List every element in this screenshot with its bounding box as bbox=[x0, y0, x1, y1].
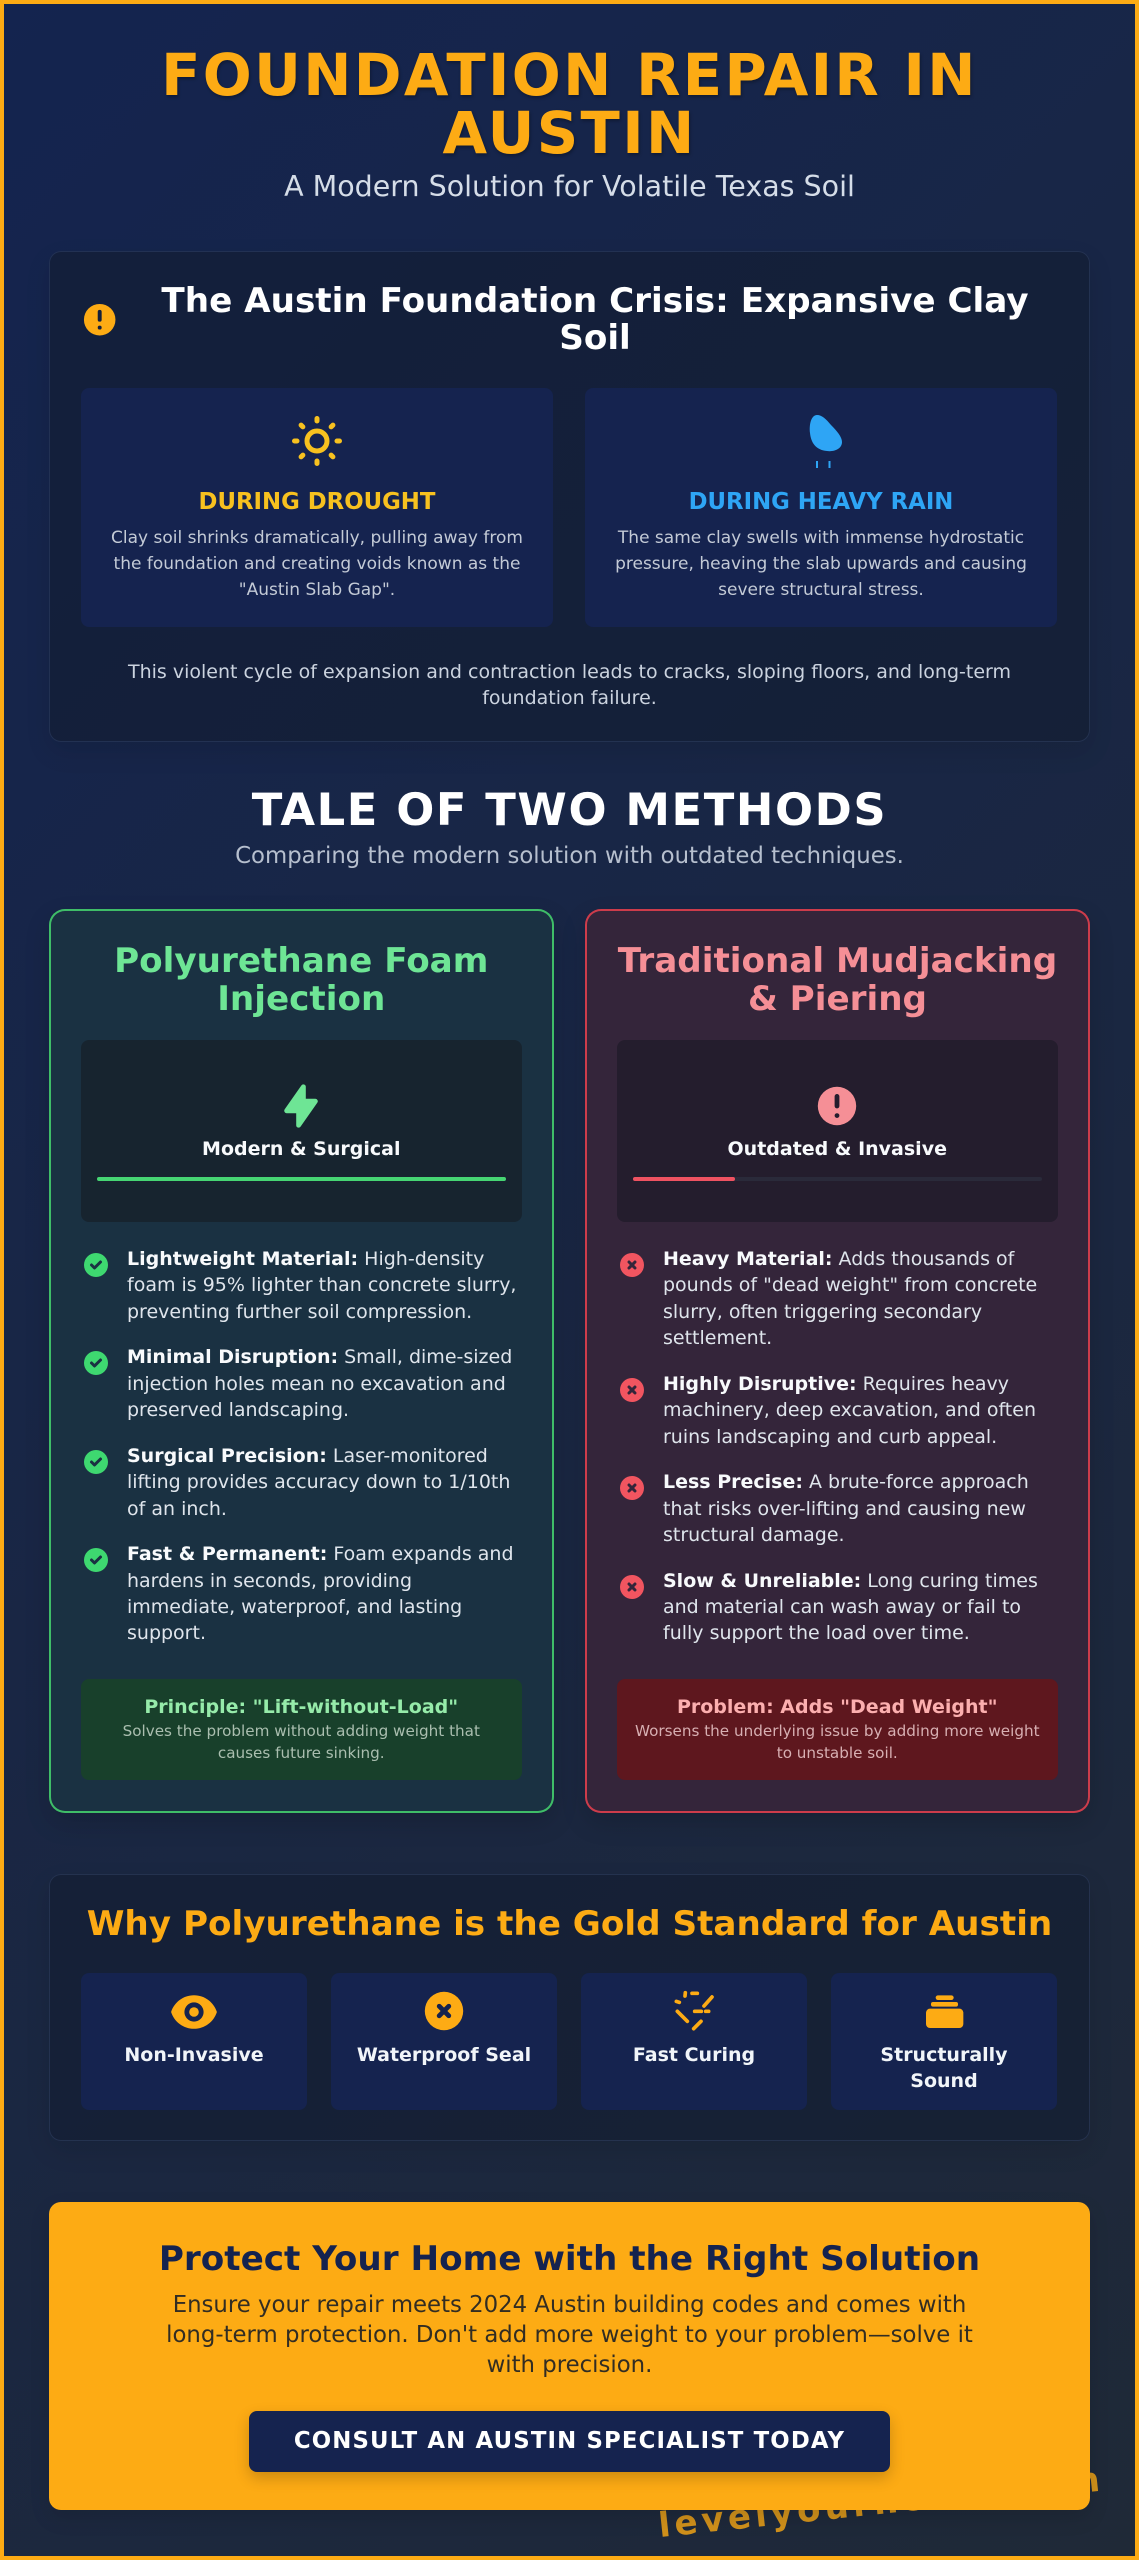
text: cycle summary bbox=[128, 660, 1011, 709]
benefit: surgical precision bbox=[84, 1445, 510, 1520]
drawback: slow and unreliable: and material can wash away or fail to bbox=[663, 1596, 1021, 1618]
heading: polyurethane: Polyurethane Foam bbox=[114, 940, 488, 980]
drawback: heavy material: settlement. bbox=[663, 1327, 772, 1349]
benefit: lightweight material: preventing further soil compression. bbox=[127, 1301, 472, 1323]
text: drought bbox=[111, 528, 523, 600]
heading: crisis bbox=[161, 280, 1029, 358]
label: modern and surgical: Modern & Surgical bbox=[202, 1138, 400, 1160]
gauge: modern and surgical bbox=[81, 1040, 522, 1222]
callout title: Principle: "Lift-without-Load" bbox=[144, 1696, 458, 1718]
callout title: Problem: Adds "Dead Weight" bbox=[677, 1696, 998, 1718]
benefit: minimal disruption: preserved landscaping. bbox=[127, 1399, 349, 1421]
button: consult a specialist: CONSULT AN AUSTIN SPECIALIST TODAY bbox=[294, 2428, 845, 2454]
text: heavy rain: pressure, heaving the slab upwards and causing bbox=[615, 554, 1027, 574]
drawback: less precise: that risks over-lifting and causing new bbox=[663, 1498, 1026, 1520]
icon: alert circle bbox=[84, 304, 116, 336]
heading: polyurethane: Injection bbox=[217, 978, 385, 1018]
callout text: to unstable soil. bbox=[777, 1744, 898, 1762]
text: heavy rain: severe structural stress. bbox=[718, 580, 924, 600]
heading: mudjacking bbox=[618, 940, 1057, 1018]
benefit: surgical precision: lifting provides accuracy down to 1/10th bbox=[127, 1471, 510, 1493]
button: consult a specialist bbox=[249, 2411, 890, 2472]
tile: structurally sound bbox=[831, 1973, 1057, 2110]
text: building codes: long-term protection. Don't add more weight to your problem—solve it bbox=[166, 2322, 973, 2348]
benefit: fast and permanent: immediate, waterproof, and lasting bbox=[127, 1596, 462, 1618]
callout text: Worsens the underlying issue by adding more weight bbox=[635, 1722, 1040, 1740]
heading: tale of two methods: TALE OF TWO METHODS bbox=[252, 783, 887, 836]
text: building codes bbox=[166, 2292, 973, 2378]
benefit: fast and permanent: hardens in seconds, providing bbox=[127, 1570, 412, 1592]
text: cycle summary: foundation failure. bbox=[482, 687, 657, 709]
text: heavy rain: The same clay swells with immense hydrostatic bbox=[618, 528, 1024, 548]
benefit: lightweight material: foam is 95% lighter than concrete slurry, bbox=[127, 1274, 516, 1296]
drawback: heavy material: slurry, often triggering secondary bbox=[663, 1301, 982, 1323]
text: drought: Clay soil shrinks dramatically, pulling away from bbox=[111, 528, 523, 548]
subtitle: A Modern Solution for Volatile Texas Soil bbox=[284, 170, 855, 203]
icon: stacked layers bbox=[926, 1995, 964, 2028]
text: heavy rain bbox=[615, 528, 1027, 600]
benefit: lightweight material: Lightweight Material: High-density bbox=[127, 1248, 484, 1270]
icon: sun bbox=[292, 416, 342, 466]
callout: dead weight bbox=[617, 1679, 1058, 1780]
drawback: heavy material bbox=[620, 1248, 1037, 1349]
label: Waterproof Seal bbox=[357, 2044, 531, 2066]
panel: polyurethane foam injection bbox=[49, 909, 554, 1813]
subheading: comparing methods: Comparing the modern solution with outdated techniques. bbox=[235, 842, 904, 868]
heading: protect your home: Protect Your Home with the Right Solution bbox=[159, 2239, 980, 2279]
tile: non-invasive bbox=[81, 1973, 307, 2110]
drawback: heavy material: Heavy Material: Adds thousands of bbox=[663, 1248, 1014, 1270]
heading: polyurethane bbox=[114, 940, 488, 1018]
text: cycle summary: This violent cycle of expansion and contraction leads to cracks, sloping floors, and long-term bbox=[128, 660, 1011, 682]
drawback: slow and unreliable bbox=[620, 1570, 1038, 1644]
label: Structurally bbox=[880, 2044, 1008, 2066]
benefit: minimal disruption: Minimal Disruption: Small, dime-sized bbox=[127, 1346, 512, 1368]
benefit: minimal disruption bbox=[84, 1346, 512, 1421]
drawback: less precise bbox=[620, 1471, 1029, 1546]
heading: during heavy rain: DURING HEAVY RAIN bbox=[689, 489, 953, 515]
drawback: highly disruptive: Highly Disruptive: Requires heavy bbox=[663, 1373, 1009, 1395]
benefit: lightweight material bbox=[84, 1248, 516, 1323]
benefit: surgical precision: Surgical Precision: Laser-monitored bbox=[127, 1445, 488, 1467]
label: Fast Curing bbox=[633, 2044, 755, 2066]
icon: exclamation circle bbox=[818, 1086, 856, 1126]
drawback: highly disruptive bbox=[620, 1373, 1036, 1448]
panel: traditional mudjacking and piering bbox=[585, 909, 1090, 1813]
panel: call to action bbox=[49, 2202, 1090, 2510]
drawback: highly disruptive: machinery, deep excavation, and often bbox=[663, 1399, 1036, 1421]
heading: during drought: DURING DROUGHT bbox=[199, 489, 435, 515]
card: during heavy rain bbox=[585, 388, 1057, 627]
text: drought: "Austin Slab Gap". bbox=[239, 580, 395, 600]
callout text bbox=[635, 1722, 1040, 1762]
text: building codes: Ensure your repair meets 2024 Austin building codes and comes with bbox=[173, 2292, 966, 2318]
tile: waterproof seal bbox=[331, 1973, 557, 2110]
label: Non-Invasive bbox=[124, 2044, 264, 2066]
heading: crisis: Soil bbox=[559, 318, 631, 358]
heading: mudjacking: & Piering bbox=[748, 978, 927, 1018]
drawback: slow and unreliable: fully support the load over time. bbox=[663, 1622, 970, 1644]
gauge: outdated and invasive bbox=[617, 1040, 1058, 1222]
drawback: less precise: structural damage. bbox=[663, 1524, 845, 1546]
heading: crisis: The Austin Foundation Crisis: Expansive Clay bbox=[161, 280, 1029, 320]
title: FOUNDATION REPAIR IN bbox=[161, 42, 978, 109]
title: AUSTIN bbox=[442, 100, 697, 167]
drawback: less precise: Less Precise: A brute-force approach bbox=[663, 1471, 1029, 1493]
callout text: causes future sinking. bbox=[218, 1744, 385, 1762]
bar: one quarter bbox=[633, 1177, 1042, 1181]
benefit: fast and permanent: support. bbox=[127, 1622, 206, 1644]
benefit: minimal disruption: injection holes mean no excavation and bbox=[127, 1373, 506, 1395]
icon: sealed x circle bbox=[424, 1992, 464, 2030]
label: Sound bbox=[910, 2070, 978, 2092]
benefit: fast and permanent: Fast & Permanent: Foam expands and bbox=[127, 1543, 514, 1565]
icon: lightning bolt bbox=[284, 1084, 318, 1128]
icon: fast curing spark bbox=[674, 1990, 714, 2031]
callout text bbox=[123, 1722, 480, 1762]
panel: gold standard bbox=[49, 1874, 1090, 2141]
tile: fast curing bbox=[581, 1973, 807, 2110]
card: during drought bbox=[81, 388, 553, 627]
icon: eye bbox=[171, 1995, 217, 2029]
benefit: fast and permanent bbox=[84, 1543, 514, 1644]
callout text: Solves the problem without adding weight that bbox=[123, 1722, 480, 1740]
watermark: levelyourhome.com: levelyourhome.com bbox=[657, 2460, 1106, 2546]
drawback: slow and unreliable: Slow & Unreliable: Long curing times bbox=[663, 1570, 1038, 1592]
label bbox=[880, 2044, 1008, 2092]
drawback: highly disruptive: ruins landscaping and curb appeal. bbox=[663, 1426, 997, 1448]
heading: gold standard: Why Polyurethane is the Gold Standard for Austin bbox=[87, 1904, 1052, 1944]
drawback: heavy material: pounds of "dead weight" from concrete bbox=[663, 1274, 1037, 1296]
benefit: surgical precision: of an inch. bbox=[127, 1498, 227, 1520]
text: building codes: with precision. bbox=[487, 2352, 652, 2378]
label: outdated and invasive: Outdated & Invasive bbox=[728, 1138, 947, 1160]
icon: rain drop bbox=[810, 415, 842, 468]
title bbox=[161, 42, 978, 167]
heading: mudjacking: Traditional Mudjacking bbox=[618, 940, 1057, 980]
bar: full bbox=[97, 1177, 506, 1181]
callout: lift without load bbox=[81, 1679, 522, 1780]
text: drought: the foundation and creating voids known as the bbox=[114, 554, 520, 574]
panel: the Austin foundation crisis bbox=[49, 251, 1090, 742]
